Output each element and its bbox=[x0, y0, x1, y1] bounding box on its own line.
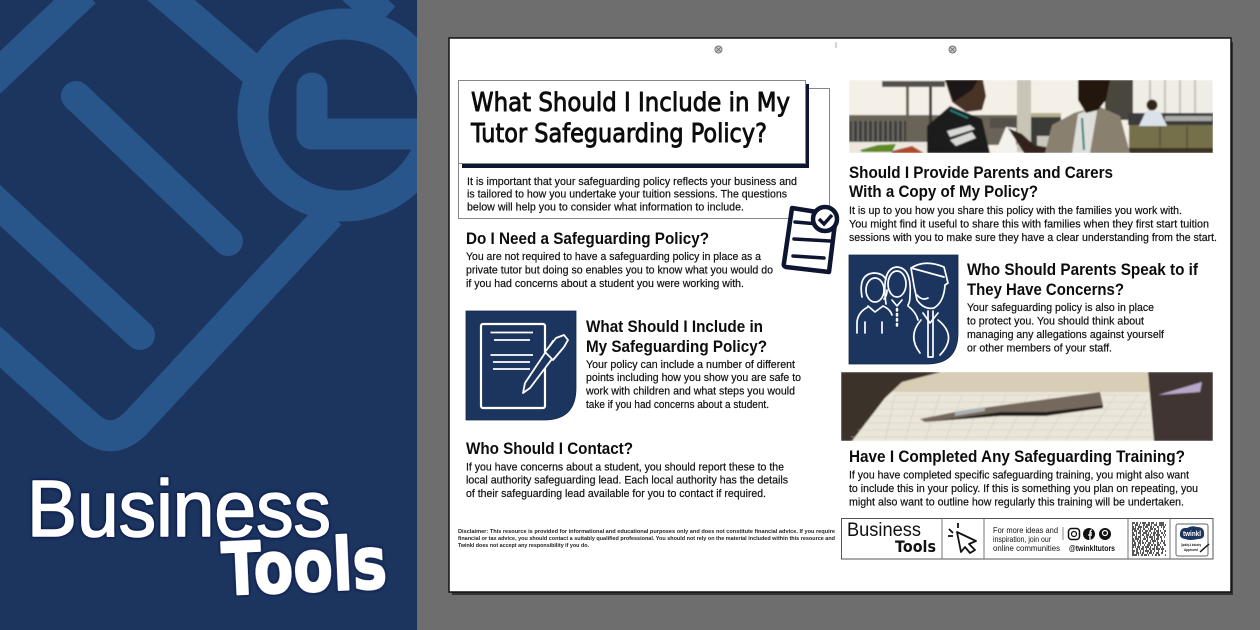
section: Who Should Parents Speak to: or other members of your staff. bbox=[967, 342, 1112, 354]
section: Who Should Parents Speak to: Who Should Parents Speak to if bbox=[967, 261, 1198, 279]
section: What Should I Include: My Safeguarding Policy? bbox=[586, 338, 767, 356]
photo: pen on notebook bbox=[841, 372, 1213, 441]
section: Who Should Parents Speak to: to protect you. You should think about bbox=[967, 316, 1144, 328]
footer text: inspiration, join our bbox=[993, 534, 1051, 544]
panel: title and intro bbox=[458, 80, 830, 218]
section: Should I Provide Parents and Carers: Should I Provide Parents and Carers bbox=[849, 164, 1113, 182]
disclaimer: financial or tax advice, you should contact a suitably qualified professional. You should not rely on the material included within this resource and bbox=[458, 536, 835, 542]
section: Have I Completed Any Safeguarding Training: might also want to outline how regularly this training will be undertaken. bbox=[849, 496, 1184, 508]
heading: Tools: Tools bbox=[220, 521, 389, 612]
disclaimer: Disclaimer: This resource is provided for informational and educational purposes only and does not constitute financial advice. If you require bbox=[458, 529, 835, 535]
title: Tutor Safeguarding Policy? bbox=[470, 119, 767, 149]
section: What Should I Include: work with children and what steps you would bbox=[585, 386, 795, 398]
icon: cursor click bbox=[948, 523, 976, 553]
icon: quality badge bbox=[1176, 524, 1209, 556]
icon: quality badge: twinkl bbox=[1183, 531, 1201, 538]
footer logo: Tools bbox=[895, 537, 936, 556]
footer logo: Business bbox=[847, 520, 921, 541]
icons: social media bbox=[1068, 528, 1111, 540]
crop mark left bbox=[715, 46, 722, 53]
disclaimer: Twinkl does not accept any responsibility if you do. bbox=[458, 543, 590, 549]
icon: QR code bbox=[1132, 522, 1166, 556]
section: Who Should Parents Speak to: managing any allegations against yourself bbox=[967, 329, 1165, 341]
section: What Should I Include: points including how you show you are safe to bbox=[586, 372, 801, 384]
section: Who Should I Contact: of their safeguarding lead available for you to contact if required. bbox=[466, 488, 766, 500]
section: Do I Need a Safeguarding Policy: private tutor but doing so enables you to know what you would do bbox=[466, 264, 773, 276]
heading: Business: Business bbox=[27, 464, 331, 553]
icon: quality badge: Approved bbox=[1184, 548, 1198, 552]
intro text bbox=[467, 176, 797, 214]
title: What Should I Include in My bbox=[471, 88, 790, 118]
crop mark right bbox=[949, 46, 956, 53]
icon: quality badge: Quality & Industry bbox=[1181, 543, 1201, 547]
section: Who Should I Contact bbox=[466, 440, 788, 500]
icon: document and pen tile bbox=[466, 311, 576, 420]
panel: left navy cover bbox=[0, 0, 435, 630]
photo: two men talking bbox=[849, 80, 1213, 153]
section: Have I Completed Any Safeguarding Training: Have I Completed Any Safeguarding Training? bbox=[849, 448, 1185, 466]
section: Do I Need a Safeguarding Policy: if you had concerns about a student you were working with. bbox=[466, 278, 744, 290]
footer bar bbox=[842, 518, 1213, 559]
section: What Should I Include: take if you had concerns about a student. bbox=[586, 399, 769, 411]
disclaimer bbox=[458, 529, 835, 549]
icon: people tile bbox=[849, 255, 958, 364]
section: Do I Need a Safeguarding Policy bbox=[466, 230, 773, 290]
section: Do I Need a Safeguarding Policy: Do I Need a Safeguarding Policy? bbox=[466, 230, 709, 248]
icon: large clipboard watermark bbox=[0, 0, 435, 436]
footer logo bbox=[847, 520, 936, 556]
section: Should I Provide Parents and Carers: With a Copy of My Policy? bbox=[849, 183, 1038, 201]
title bbox=[470, 88, 790, 149]
section: Should I Provide Parents and Carers: It is up to you how you share this policy with the families you work with. bbox=[849, 205, 1182, 217]
section: Have I Completed Any Safeguarding Training: to include this in your policy. If this is something you plan on repeating, you bbox=[849, 483, 1198, 495]
section: Should I Provide Parents and Carers: You might find it useful to share this with families when they first start tuition bbox=[849, 218, 1209, 230]
intro text: It is important that your safeguarding policy reflects your business and bbox=[467, 176, 797, 188]
footer text bbox=[993, 525, 1115, 553]
section: Do I Need a Safeguarding Policy: You are not required to have a safeguarding policy in place as a bbox=[466, 251, 762, 263]
section: Who Should Parents Speak to: They Have Concerns? bbox=[967, 281, 1124, 299]
icon: checklist clipboard bbox=[784, 207, 837, 272]
section: Have I Completed Any Safeguarding Training bbox=[849, 448, 1198, 508]
intro text: is tailored to how you undertake your tuition sessions. The questions bbox=[467, 188, 787, 200]
section: What Should I Include: Your policy can include a number of different bbox=[586, 359, 795, 371]
section: Who Should Parents Speak to bbox=[967, 261, 1198, 354]
footer text: For more ideas and bbox=[993, 525, 1058, 535]
section: Who Should Parents Speak to: Your safeguarding policy is also in place bbox=[967, 302, 1154, 314]
section: Who Should I Contact: local authority safeguarding lead. Each local authority has the details bbox=[466, 474, 788, 486]
section: Should I Provide Parents and Carers bbox=[849, 164, 1217, 244]
section: Who Should I Contact: If you have concerns about a student, you should report these to the bbox=[466, 462, 784, 474]
panel: document page bbox=[449, 38, 1233, 595]
section: Have I Completed Any Safeguarding Training: If you have completed specific safeguarding training, you might also want bbox=[849, 470, 1189, 482]
section: What Should I Include bbox=[585, 318, 801, 411]
section: Should I Provide Parents and Carers: sessions with you to make sure they have a clear understanding from the start. bbox=[849, 232, 1217, 244]
footer text: online communities bbox=[993, 543, 1060, 553]
footer text: @twinkltutors bbox=[1069, 544, 1115, 553]
section: What Should I Include: What Should I Include in bbox=[586, 318, 763, 336]
section: Who Should I Contact: Who Should I Contact? bbox=[466, 440, 633, 458]
intro text: below will help you to consider what information to include. bbox=[467, 202, 744, 214]
